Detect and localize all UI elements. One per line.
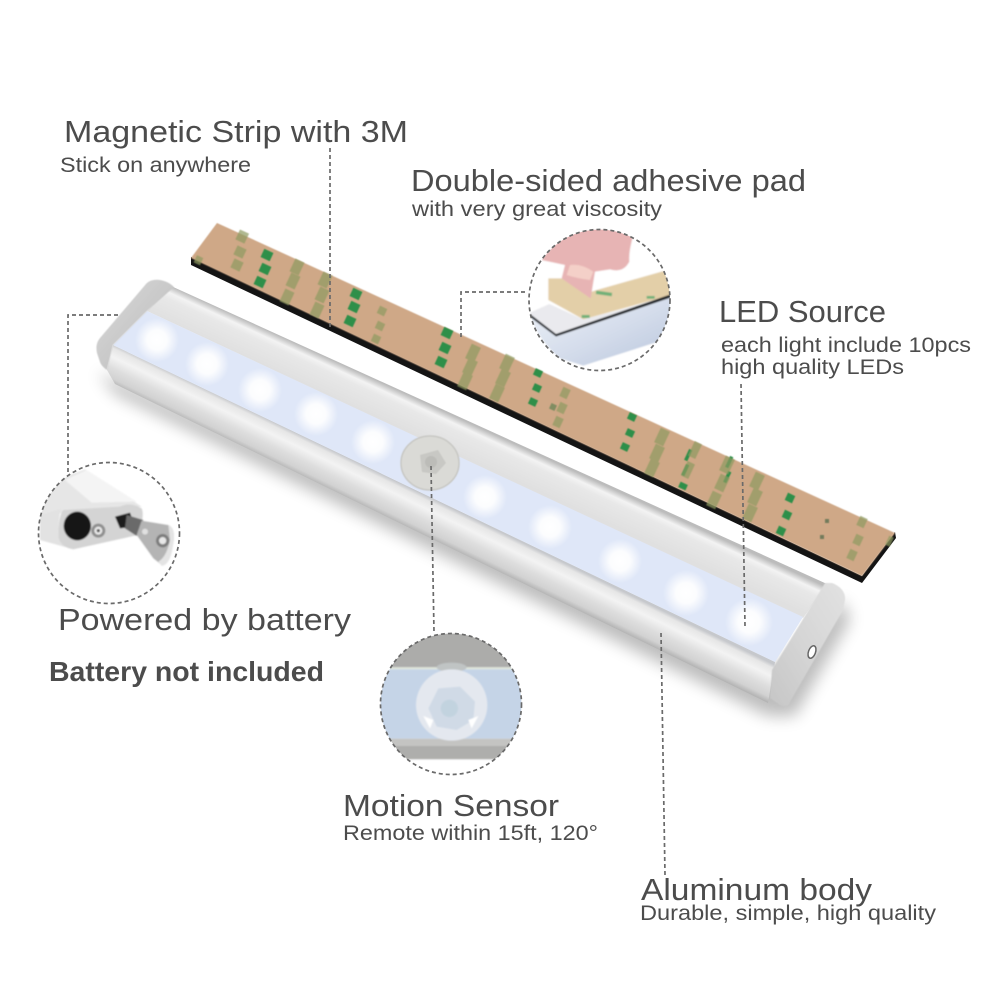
inset: motion sensor close-up [380,632,522,776]
aluminum side [531,297,672,366]
heading: LED source: LED Source [719,294,886,329]
tan pad [548,271,672,319]
LED light bar [96,280,850,716]
heading: motion sensor: Motion Sensor [343,788,559,823]
soft shadow [98,372,850,716]
leader line: battery [68,315,118,476]
light diffuser [113,311,803,662]
dashed ring [380,634,522,774]
adhesive strip with 3M backing [191,223,896,583]
power button [806,645,818,659]
battery hole [64,512,91,540]
note: battery not included: Battery not included [49,656,324,687]
aluminum top [530,304,636,334]
lens dome [416,669,487,741]
black line [530,294,672,337]
inset: battery compartment [38,462,180,604]
lens facets [428,687,475,730]
leader line: motion sensor [431,466,434,632]
subtext: aluminum body: Durable, simple, high quality [640,901,936,925]
black magnetic layer [191,257,896,583]
leader line: aluminum body [661,633,665,875]
subtext: motion sensor range: Remote within 15ft, 120° [343,821,598,845]
housing front [40,514,64,547]
contact screw [91,524,105,538]
right end cap [770,583,845,706]
subtext: adhesive pad: with very great viscosity [411,197,662,221]
LEDs [135,318,773,646]
heading: adhesive pad: Double-sided adhesive pad [411,163,806,198]
subtext: magnetic strip: Stick on anywhere [60,153,251,177]
PIR sensor dome [401,436,459,490]
metal arm [125,515,143,536]
green marks [596,291,612,296]
heading: magnetic strip: Magnetic Strip with 3M [64,114,408,149]
subtext: LED count: each light include 10pcs [721,333,971,357]
housing top [42,470,140,514]
3M marks [194,229,894,561]
black slot [115,513,135,528]
leader line: LED source [741,384,745,626]
subtext: LED quality: high quality LEDs [721,355,904,379]
dashed ring [38,462,180,604]
leader line: magnetic strip [329,148,331,330]
leader line: adhesive pad [461,292,528,337]
heading: aluminum body: Aluminum body [641,872,873,907]
dashed ring [529,230,670,370]
heading: battery: Powered by battery [58,602,352,637]
lower aluminum face [107,345,775,703]
left end cap [96,280,174,370]
lens bump [437,663,467,672]
inset: adhesive pad peel [528,228,671,372]
top face [147,286,827,618]
infographic canvas [38,120,970,924]
tan backing [191,223,895,576]
finger [542,230,633,298]
pull tab [136,520,170,563]
